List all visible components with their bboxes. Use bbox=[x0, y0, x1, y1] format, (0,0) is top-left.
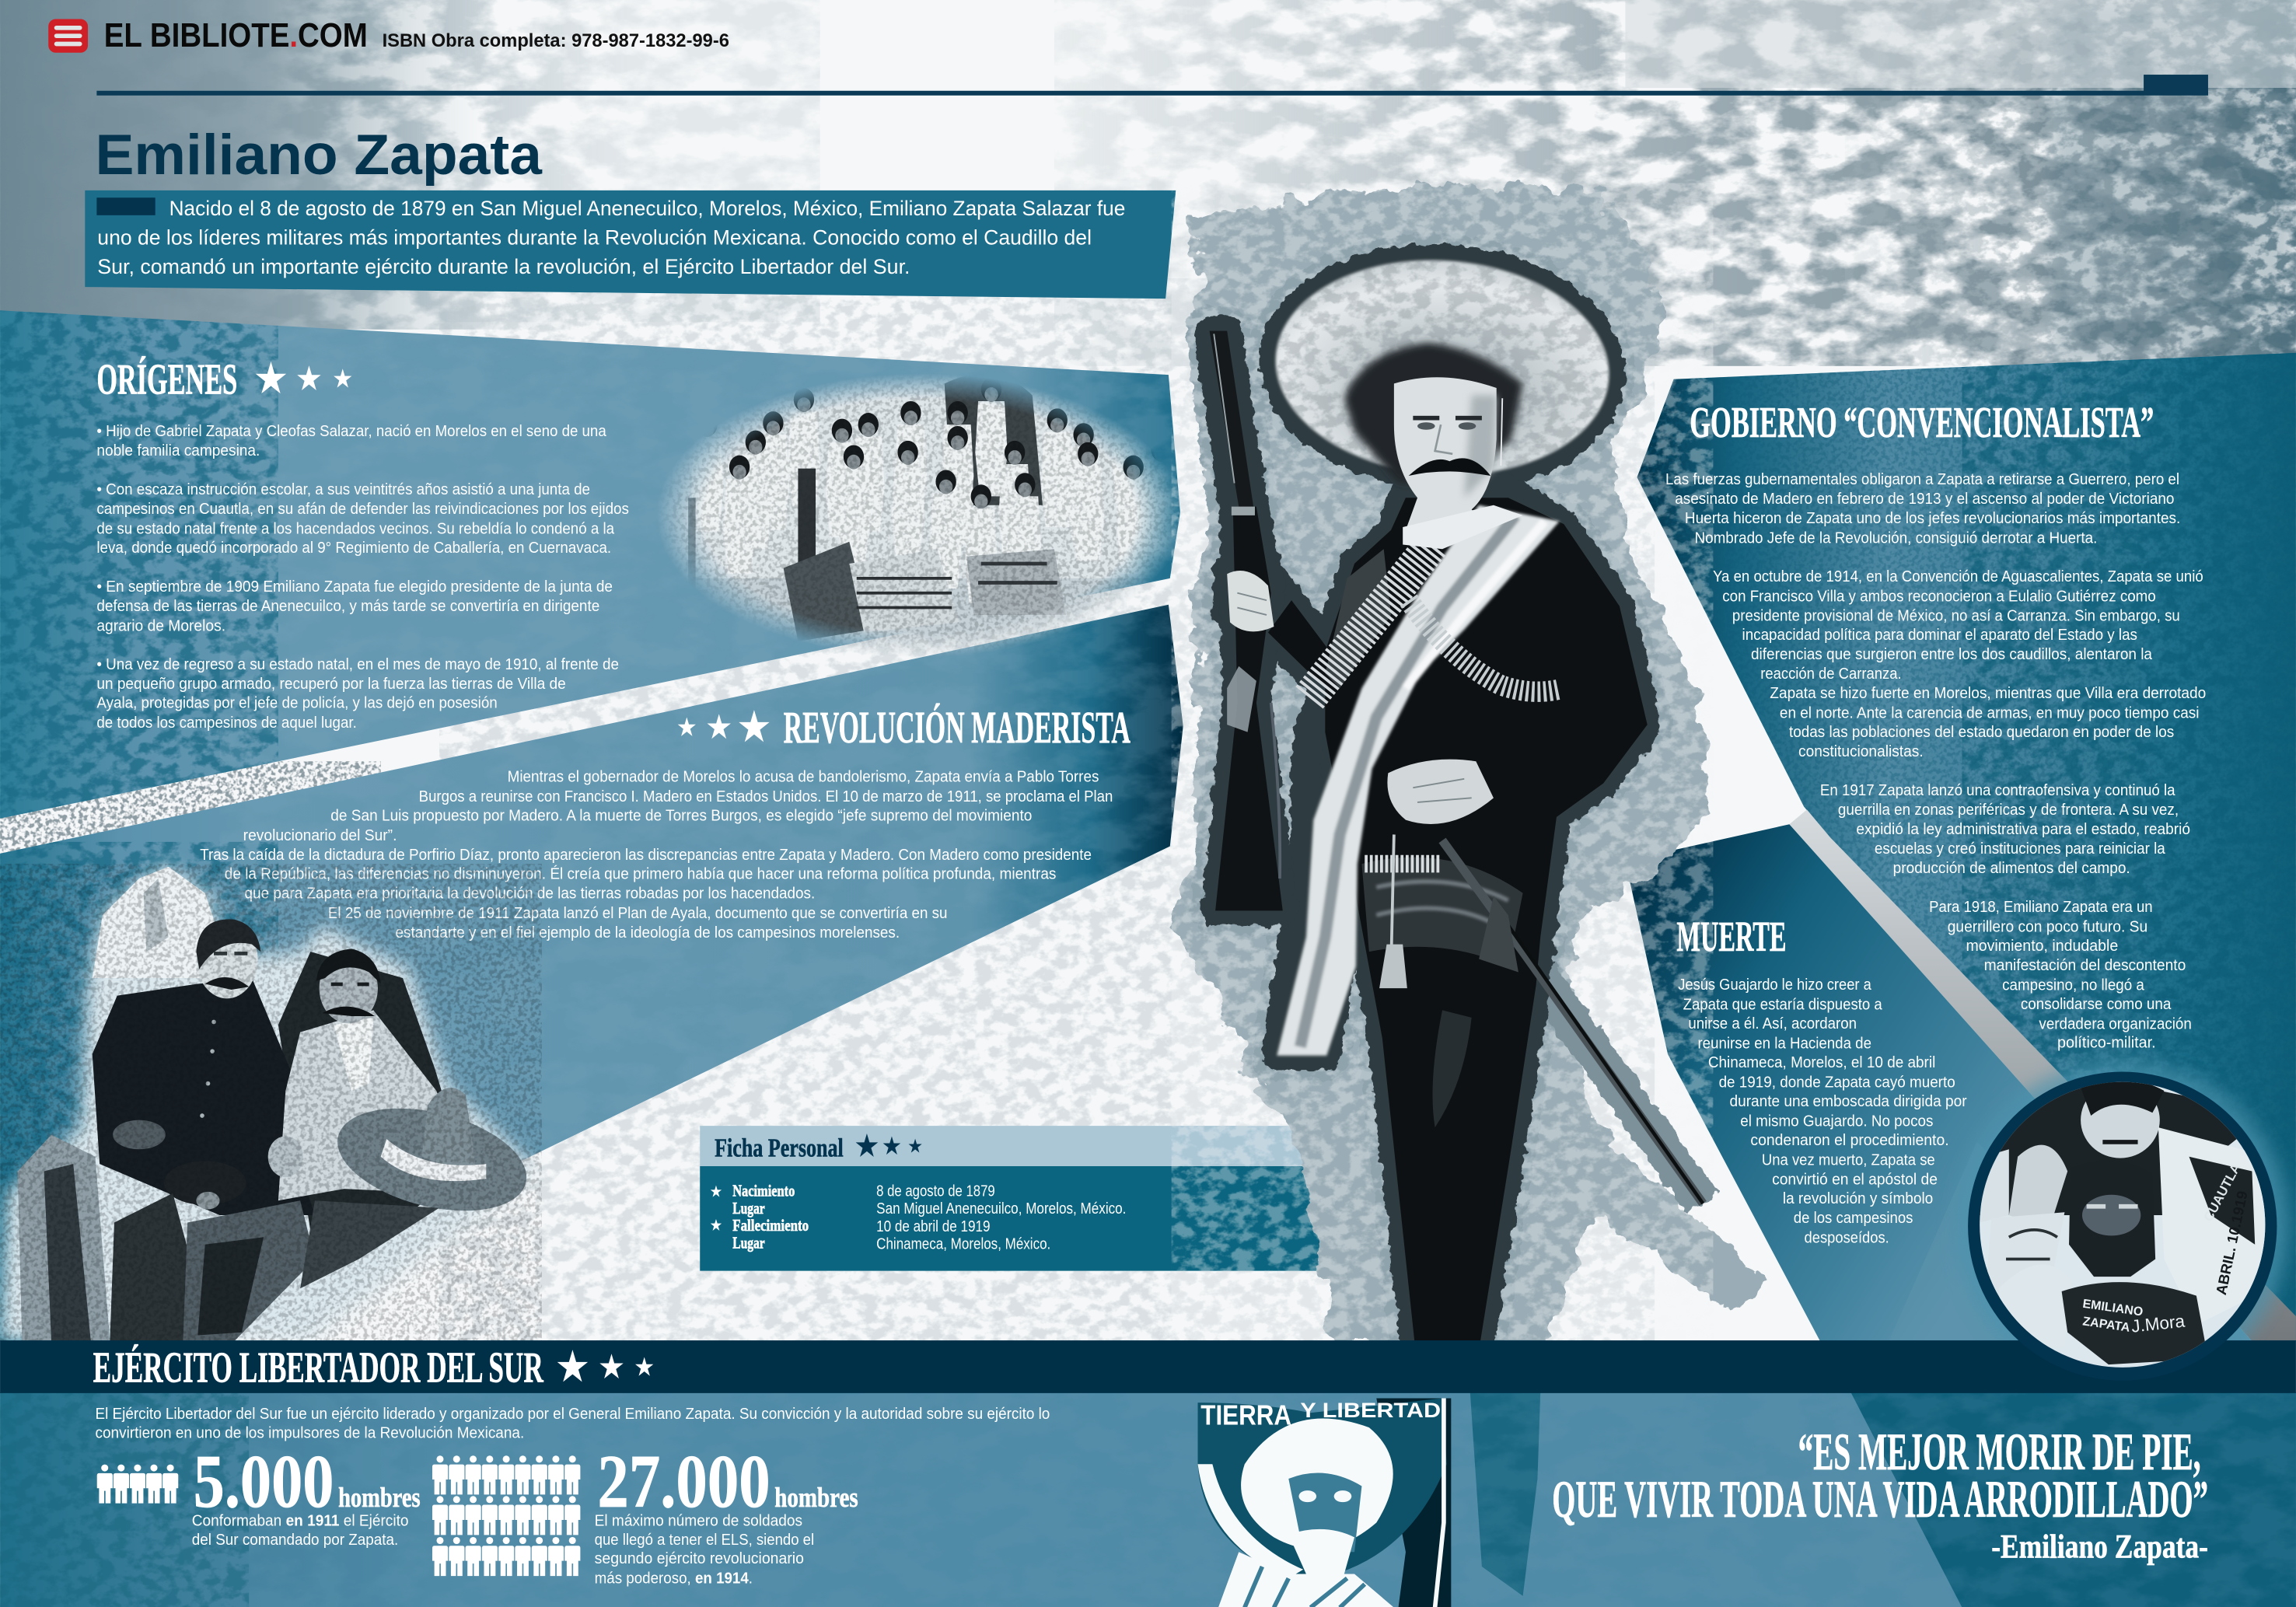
text: muerte: de 1919, donde Zapata cayó muerto bbox=[1719, 1074, 1955, 1091]
stat: 5.000 hombres: del Sur comandado por Zapata. bbox=[192, 1532, 398, 1549]
stat: 27.000 hombres: hombres bbox=[774, 1482, 858, 1513]
heading: revolucion maderista bbox=[678, 702, 1131, 753]
text: origenes: • Hijo de Gabriel Zapata y Cleofas Salazar, nació en Morelos en el seno de una bbox=[96, 423, 606, 440]
stat: 5.000 hombres: Conformaban en 1911 el Ejército bbox=[192, 1512, 408, 1529]
text: gobierno convencionalista: escuelas y creó instituciones para reiniciar la bbox=[1875, 840, 2165, 858]
text: origenes: • Una vez de regreso a su estado natal, en el mes de mayo de 1910, al frente de bbox=[96, 656, 619, 673]
photo: Zapata death medallion: ZAPATA bbox=[2081, 1315, 2131, 1335]
halo dark bbox=[1210, 248, 1703, 1341]
text: ejercito intro: convirtieron en uno de los impulsores de la Revolución Mexicana. bbox=[95, 1424, 524, 1441]
text: gobierno convencionalista: constitucionalistas. bbox=[1798, 743, 1924, 760]
poster: Tierra y Libertad bbox=[1198, 1398, 1451, 1607]
text: revolucion maderista: estandarte y en el fiel ejemplo de la ideología de los campesinos morelenses. bbox=[396, 924, 900, 941]
sash bbox=[1277, 505, 1560, 1056]
text: muerte: reunirse en la Hacienda de bbox=[1697, 1035, 1871, 1052]
bottom background bbox=[0, 1392, 2296, 1607]
glow behind photo bbox=[0, 864, 539, 1341]
panel: revolucion maderista background bbox=[0, 600, 1186, 1347]
gray diagonal stripe bbox=[1789, 809, 2296, 1341]
text: origenes: noble familia campesina. bbox=[96, 442, 260, 459]
text: gobierno convencionalista: Huerta hiceron de Zapata uno de los jefes revolucionarios más importantes. bbox=[1685, 510, 2180, 527]
portrait: Emiliano Zapata with rifle and sword bbox=[1172, 183, 1772, 1341]
text: gobierno convencionalista: Para 1918, Emiliano Zapata era un bbox=[1929, 899, 2153, 916]
stat: 27.000 hombres: más poderoso, en 1914. bbox=[595, 1570, 753, 1588]
text: muerte: condenaron el procedimiento. bbox=[1750, 1132, 1949, 1149]
hands bbox=[1227, 571, 1494, 824]
quote bbox=[1552, 1423, 2208, 1566]
photo: Zapata death medallion: ABRIL. 10.1919 bbox=[2213, 1190, 2251, 1296]
panel: ficha personal: 10 de abril de 1919 bbox=[876, 1218, 990, 1235]
text: origenes: de todos los campesinos de aquel lugar. bbox=[96, 714, 357, 732]
panel: ficha personal: 8 de agosto de 1879 bbox=[876, 1183, 995, 1200]
hands bbox=[268, 1136, 303, 1177]
panel: ficha personal: Fallecimiento bbox=[732, 1217, 809, 1235]
Villa cap bbox=[164, 1161, 246, 1205]
text: origenes: Ayala, protegidas por el jefe de policía, y las dejó en posesión bbox=[96, 695, 498, 712]
text: gobierno convencionalista: guerrilla en zonas periféricas y de frontera. A su vez, bbox=[1838, 802, 2179, 819]
panel: intro: uno de los líderes militares más importantes durante la Revolución Mexicana. Conocido como el Caudillo del bbox=[97, 225, 1092, 249]
photo: Zapata death medallion bbox=[0, 1060, 2296, 1393]
Zapata bbox=[278, 1010, 461, 1200]
text: revolucion maderista: revolucionario del Sur”. bbox=[243, 827, 397, 844]
text: gobierno convencionalista: consolidarse como una bbox=[2021, 996, 2172, 1013]
stat: 27.000 hombres: segundo ejército revolucionario bbox=[595, 1550, 804, 1567]
panel: ficha personal bbox=[700, 1126, 1370, 1271]
text: revolucion maderista bbox=[200, 769, 1113, 941]
text: gobierno convencionalista: diferencias que surgieron entre los dos caudillos, alentaron la bbox=[1751, 646, 2153, 663]
ISBN line: ISBN Obra completa: 978-987-1832-99-6 bbox=[383, 31, 729, 51]
panel: ficha personal: Chinameca, Morelos, México. bbox=[876, 1235, 1050, 1252]
text: gobierno convencionalista: guerrillero con poco futuro. Su bbox=[1948, 918, 2147, 935]
text: gobierno convencionalista: manifestación del descontento bbox=[1984, 957, 2186, 974]
text: gobierno convencionalista: Zapata se hizo fuerte en Morelos, mientras que Villa era derrotado bbox=[1770, 685, 2206, 702]
text: gobierno convencionalista: campesino, no llegó a bbox=[2002, 976, 2144, 994]
text: muerte bbox=[1678, 976, 1967, 1246]
poster: Tierra y Libertad: TIERRA bbox=[1200, 1399, 1291, 1431]
text: muerte: la revolución y símbolo bbox=[1783, 1190, 1933, 1207]
text: origenes bbox=[96, 423, 629, 732]
panel: muerte background bbox=[1625, 824, 2252, 1341]
text: origenes: campesinos en Cuautla, en su afán de defender las reivindicaciones por los ejidos bbox=[96, 501, 629, 518]
panel: intro bbox=[85, 190, 1176, 299]
text: muerte: desposeídos. bbox=[1805, 1229, 1889, 1246]
photo: Zapata death medallion: J.Mora bbox=[2130, 1312, 2186, 1336]
text: origenes: leva, donde quedó incorporado al 9° Regimiento de Caballería, en Cuernavaca. bbox=[96, 540, 611, 557]
text: gobierno convencionalista: Las fuerzas gubernamentales obligaron a Zapata a retirarse a Guerrero, pero el bbox=[1665, 471, 2179, 488]
panel: ficha personal: Lugar bbox=[732, 1235, 765, 1252]
text: revolucion maderista: Mientras el gobernador de Morelos lo acusa de bandolerismo, Zapata envía a Pablo Torres bbox=[508, 769, 1099, 786]
text: gobierno convencionalista: asesinato de Madero en febrero de 1913 y el ascenso al poder de Victoriano bbox=[1675, 491, 2174, 508]
stat: 27.000 hombres: 27.000 bbox=[597, 1440, 771, 1524]
panel: origenes background bbox=[0, 300, 1186, 827]
panel: intro: Sur, comandó un importante ejército durante la revolución, el Ejército Libertador del Sur. bbox=[97, 254, 910, 278]
photo: Zapata death medallion: EMILIANO bbox=[2081, 1298, 2144, 1319]
stat: 27.000 hombres bbox=[432, 1440, 858, 1588]
text: origenes: • Con escaza instrucción escolar, a sus veintitrés años asistió a una junta de bbox=[96, 481, 590, 498]
text: origenes: de su estado natal frente a los hacendados vecinos. Su rebeldía lo condenó a la bbox=[96, 520, 615, 537]
text: muerte: durante una emboscada dirigida por bbox=[1730, 1093, 1967, 1110]
band: ejercito libertador bbox=[0, 1340, 2296, 1393]
text: gobierno convencionalista: incapacidad política para dominar el aparato del Estado y las bbox=[1742, 627, 2137, 644]
text: muerte: Chinameca, Morelos, el 10 de abril bbox=[1708, 1054, 1935, 1071]
header rule bbox=[96, 75, 2208, 96]
photo: family group bbox=[659, 375, 1180, 655]
rifle bbox=[1210, 331, 1283, 910]
text: muerte: convirtió en el apóstol de bbox=[1772, 1171, 1938, 1188]
logo: El Biblioteca.com: EL BIBLIOTE.COM bbox=[104, 17, 368, 54]
text: origenes: un pequeño grupo armado, recuperó por la fuerza las tierras de Villa de bbox=[96, 676, 566, 693]
panel: ficha personal: Lugar bbox=[732, 1200, 765, 1217]
heading: ficha personal: Ficha Personal bbox=[715, 1134, 844, 1163]
text: gobierno convencionalista: con Francisco Villa y ambos reconocieron a Eulalio Gutiérrez como bbox=[1722, 588, 2156, 605]
stat: 5.000 hombres bbox=[97, 1440, 421, 1549]
text: revolucion maderista: de la República, las diferencias no disminuyeron. Él creía que primero había que hacer una reforma política profunda, mientras bbox=[225, 865, 1056, 882]
stat: 5.000 hombres: 5.000 bbox=[194, 1440, 334, 1524]
text: muerte: el mismo Guajardo. No pocos bbox=[1740, 1113, 1933, 1130]
text: ejercito intro: El Ejército Libertador del Sur fue un ejército liderado y organizado por el General Emiliano Zapata. Su convicción y la autoridad sobre su ejército lo bbox=[95, 1406, 1050, 1423]
text: muerte: Zapata que estaría dispuesto a bbox=[1683, 996, 1882, 1013]
photo: Villa and Zapata seated bbox=[0, 864, 542, 1341]
text: gobierno convencionalista: Nombrado Jefe de la Revolución, consiguió derrotar a Huerta. bbox=[1694, 529, 2097, 547]
text: gobierno convencionalista: movimiento, indudable bbox=[1966, 938, 2118, 955]
photo: Zapata death medallion: CUAUTLA bbox=[2200, 1161, 2244, 1224]
panel: ficha personal: San Miguel Anenecuilco, Morelos, México. bbox=[876, 1200, 1126, 1217]
text: gobierno convencionalista: En 1917 Zapata lanzó una contraofensiva y continuó la bbox=[1820, 782, 2175, 799]
text: origenes: • En septiembre de 1909 Emiliano Zapata fue elegido presidente de la junta de bbox=[96, 578, 613, 596]
hair bbox=[1344, 343, 1523, 483]
heading: muerte: MUERTE bbox=[1676, 913, 1787, 960]
poster: Tierra y Libertad: Y LIBERTAD bbox=[1300, 1399, 1441, 1422]
text: gobierno convencionalista: verdadera organización bbox=[2039, 1016, 2192, 1033]
Villa jacket bbox=[93, 978, 315, 1215]
quote: -Emiliano Zapata- bbox=[1991, 1528, 2208, 1566]
text: gobierno convencionalista: Ya en octubre de 1914, en la Convención de Aguascalientes, Zapata se unió bbox=[1713, 568, 2203, 585]
bandoliers bbox=[1308, 545, 1558, 864]
sword and tassel bbox=[1379, 834, 1703, 1204]
panel: ficha personal: Nacimiento bbox=[732, 1183, 795, 1200]
text: ejercito intro bbox=[95, 1406, 1050, 1441]
text: revolucion maderista: El 25 de noviembre de 1911 Zapata lanzó el Plan de Ayala, documento que se convertiría en su bbox=[328, 905, 948, 922]
halo gray bbox=[1172, 183, 1772, 1341]
text: origenes: defensa de las tierras de Anenecuilco, y más tarde se convertiría en dirigente bbox=[96, 598, 599, 615]
text: muerte: unirse a él. Así, acordaron bbox=[1688, 1015, 1857, 1032]
text: revolucion maderista: Tras la caída de la dictadura de Porfirio Díaz, pronto aparecieron las discrepancias entre Zapata y Madero. Con Madero como presidente bbox=[200, 847, 1092, 864]
text: muerte: Una vez muerto, Zapata se bbox=[1762, 1151, 1935, 1169]
panel: intro: Nacido el 8 de agosto de 1879 en San Miguel Anenecuilco, Morelos, México, Emiliano Zapata Salazar fue bbox=[169, 196, 1125, 220]
text: revolucion maderista: Burgos a reunirse con Francisco I. Madero en Estados Unidos. El 10 de marzo de 1911, se proclama el Plan bbox=[419, 788, 1113, 805]
face bbox=[1394, 377, 1523, 549]
stat: 5.000 hombres: hombres bbox=[338, 1482, 421, 1513]
text: gobierno convencionalista: presidente provisional de México, no así a Carranza. Sin embargo, su bbox=[1732, 607, 2180, 624]
text: gobierno convencionalista bbox=[1665, 471, 2206, 1051]
text: gobierno convencionalista: político-militar. bbox=[2057, 1034, 2156, 1051]
text: gobierno convencionalista: expidió la ley administrativa para el estado, reabrió bbox=[1856, 821, 2190, 838]
Zapata chair bbox=[278, 952, 466, 1259]
heading: origenes: ORÍGENES bbox=[96, 356, 237, 404]
icon: grid of 27 soldiers bbox=[432, 1455, 580, 1576]
jacket and trousers bbox=[1268, 498, 1648, 1341]
text: muerte: de los campesinos bbox=[1794, 1210, 1913, 1227]
stat: 27.000 hombres: El máximo número de soldados bbox=[595, 1512, 802, 1529]
text: revolucion maderista: de San Luis propuesto por Madero. A la muerte de Torres Burgos, es elegido “jefe supremo del movimiento bbox=[330, 808, 1032, 825]
title: Emiliano Zapata bbox=[95, 123, 543, 187]
text: gobierno convencionalista: reacción de Carranza. bbox=[1760, 666, 1902, 683]
heading: ejercito libertador del sur: EJÉRCITO LIBERTADOR DEL SUR bbox=[93, 1344, 543, 1392]
text: gobierno convencionalista: en el norte. Ante la carencia de armas, en muy poco tiempo casi bbox=[1780, 704, 2199, 721]
icon: row of 5 soldiers bbox=[97, 1465, 178, 1504]
icon: red logo mark bbox=[48, 19, 88, 53]
stat: 27.000 hombres: que llegó a tener el ELS, siendo el bbox=[595, 1532, 814, 1549]
sombrero on knee bbox=[327, 1091, 537, 1228]
text: muerte: Jesús Guajardo le hizo creer a bbox=[1678, 976, 1871, 994]
text: gobierno convencionalista: producción de alimentos del campo. bbox=[1893, 860, 2130, 877]
text: revolucion maderista: que para Zapata era prioritaria la devolución de las tierras robadas por los hacendados. bbox=[245, 885, 815, 902]
sombrero bbox=[1260, 249, 1625, 486]
panel: gobierno convencionalista background bbox=[1637, 351, 2296, 1347]
chair left and lower bbox=[18, 1134, 110, 1341]
text: gobierno convencionalista: todas las poblaciones del estado quedaron en poder de los bbox=[1789, 724, 2174, 741]
text: origenes: agrario de Morelos. bbox=[96, 617, 225, 634]
heading: revolucion maderista: REVOLUCIÓN MADERISTA bbox=[784, 702, 1131, 753]
